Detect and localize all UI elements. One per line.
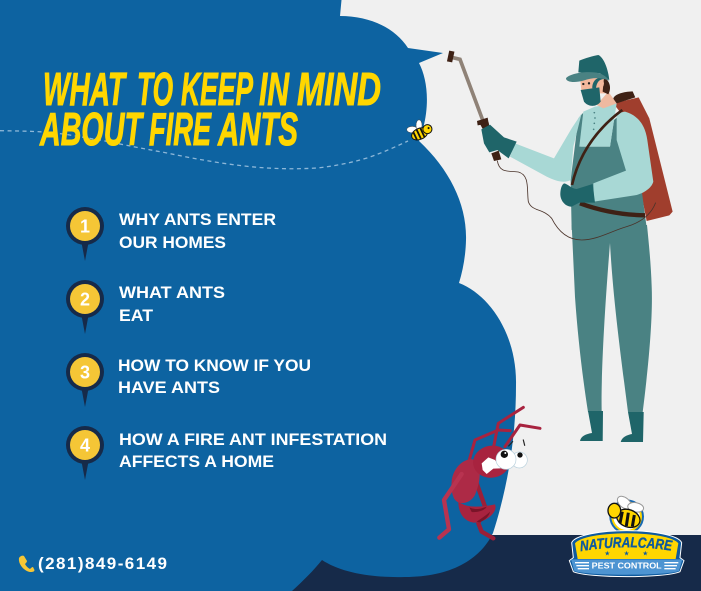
item 1 text: WHY ANTS ENTER <box>119 210 276 229</box>
title: ANTS <box>217 103 298 155</box>
spray hose <box>497 161 656 240</box>
front leg <box>439 474 462 538</box>
dashed bee flight path <box>0 131 408 169</box>
wand handle <box>491 151 501 161</box>
item 2 text: WHAT ANTS <box>119 283 225 302</box>
item 4 text: HOW A FIRE ANT INFESTATION <box>119 430 387 449</box>
item 3 text: HAVE ANTS <box>118 378 220 397</box>
list item 4 <box>66 426 387 480</box>
item 1 text: OUR HOMES <box>119 233 226 252</box>
list item 1 <box>66 207 276 261</box>
sprayer wand <box>447 51 490 131</box>
title: IN <box>259 63 290 115</box>
icon: small bee <box>403 115 434 144</box>
icon: phone <box>19 556 34 572</box>
company logo <box>568 496 684 578</box>
logo stars: ★ <box>624 550 630 558</box>
item 3 text: HOW TO KNOW IF YOU <box>118 356 311 375</box>
item 1 text <box>119 210 276 252</box>
shirt buttons <box>593 112 596 130</box>
head <box>471 443 513 481</box>
logo side stripes <box>575 563 678 569</box>
logo stars: ★ <box>604 550 610 558</box>
pin 3: 3 <box>80 362 90 382</box>
legs <box>572 225 652 412</box>
overalls <box>571 112 647 230</box>
shirt and arms <box>510 103 653 202</box>
title <box>39 63 381 155</box>
pin 2: 2 <box>80 290 90 310</box>
logo stars <box>604 550 648 558</box>
left glove <box>560 183 595 207</box>
abdomen <box>458 502 496 523</box>
title: WHAT <box>43 63 127 115</box>
neck and head <box>580 77 617 108</box>
thorax <box>451 459 480 503</box>
illustration: pest control worker <box>447 51 673 240</box>
title: MIND <box>297 63 381 115</box>
straps <box>572 110 645 215</box>
pin 2 <box>66 280 104 334</box>
logo tagline: PEST CONTROL <box>592 561 662 571</box>
blue cloud panel <box>0 0 516 591</box>
eyes <box>496 440 527 469</box>
title: FIRE <box>149 103 212 155</box>
title: KEEP <box>181 63 253 115</box>
logo badge <box>569 531 684 577</box>
back leg <box>477 483 493 538</box>
cap <box>566 55 609 82</box>
abdomen stripes <box>469 507 487 512</box>
antennae <box>468 407 540 463</box>
right glove <box>481 125 517 158</box>
pin 1 <box>66 207 104 261</box>
pin 4: 4 <box>80 436 90 456</box>
list item 2 <box>66 280 225 334</box>
left boot <box>580 411 603 441</box>
navy footer band <box>0 535 701 591</box>
item 4 text <box>119 430 387 471</box>
item 3 text <box>118 356 311 397</box>
phone contact <box>19 554 167 573</box>
logo bee emblem <box>608 494 644 534</box>
logo stars: ★ <box>642 550 648 558</box>
pin 4 <box>66 426 104 480</box>
logo name: NATURALCARE <box>580 537 673 552</box>
teeth <box>482 457 501 474</box>
illustration: worker legs and boots <box>572 225 652 442</box>
list item 3 <box>66 353 311 407</box>
item 4 text: AFFECTS A HOME <box>119 452 274 471</box>
pin 1: 1 <box>80 216 90 236</box>
item 2 text <box>119 283 225 325</box>
title: TO <box>137 63 173 115</box>
item 2 text: EAT <box>119 306 154 325</box>
backpack <box>613 91 673 221</box>
phone number: (281)849-6149 <box>38 554 167 573</box>
title: ABOUT <box>39 103 144 155</box>
right boot <box>621 412 644 442</box>
pin 3 <box>66 353 104 407</box>
illustration: scared ant <box>439 407 540 538</box>
